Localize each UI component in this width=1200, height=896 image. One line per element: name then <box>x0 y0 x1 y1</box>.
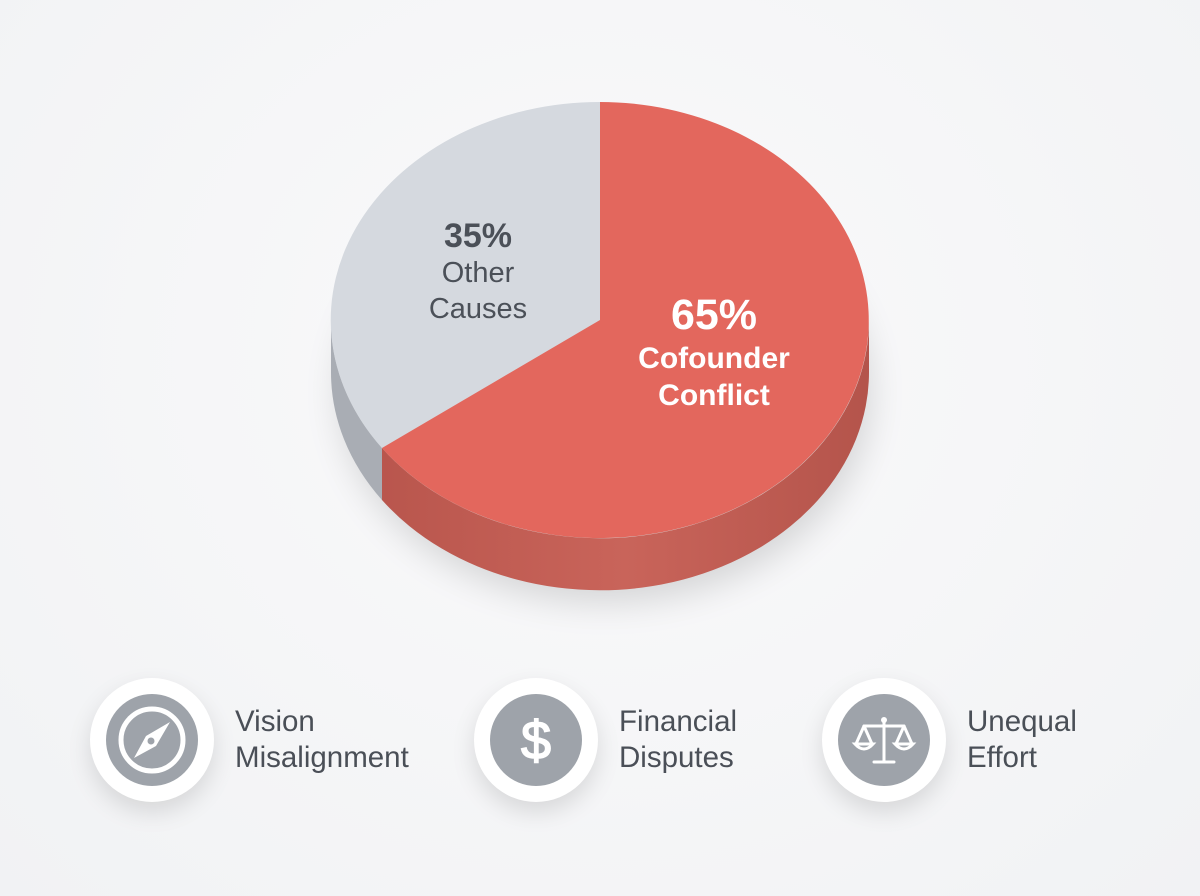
label: 65% cofounder conflict: Cofounder <box>638 342 790 375</box>
label: 65% cofounder conflict: 65% <box>671 291 757 339</box>
pie side: gray <box>331 320 382 500</box>
pie side: red <box>382 320 869 590</box>
label: 35% other causes: 35% <box>444 217 512 255</box>
icon: compass <box>90 678 214 802</box>
item: vision misalignment: Misalignment <box>235 741 409 774</box>
slice: cofounder conflict <box>382 102 869 538</box>
item: unequal effort: Effort <box>967 741 1037 774</box>
item: unequal effort: Unequal <box>967 705 1077 738</box>
item: financial disputes <box>468 678 737 818</box>
label: 65% cofounder conflict: Conflict <box>658 379 770 412</box>
item: unequal effort <box>816 678 1077 818</box>
label: 35% other causes: Causes <box>429 293 527 325</box>
item: vision misalignment: Vision <box>235 705 315 738</box>
label: 35% other causes <box>429 217 527 325</box>
icon: dollar <box>474 678 598 802</box>
slice: other causes <box>331 102 600 448</box>
label: 35% other causes: Other <box>442 257 515 289</box>
label: 65% cofounder conflict <box>638 291 790 412</box>
item: vision misalignment <box>84 678 409 818</box>
icon: dollar: $ <box>521 711 551 771</box>
icon: scales <box>822 678 946 802</box>
item: financial disputes: Financial <box>619 705 737 738</box>
item: financial disputes: Disputes <box>619 741 734 774</box>
